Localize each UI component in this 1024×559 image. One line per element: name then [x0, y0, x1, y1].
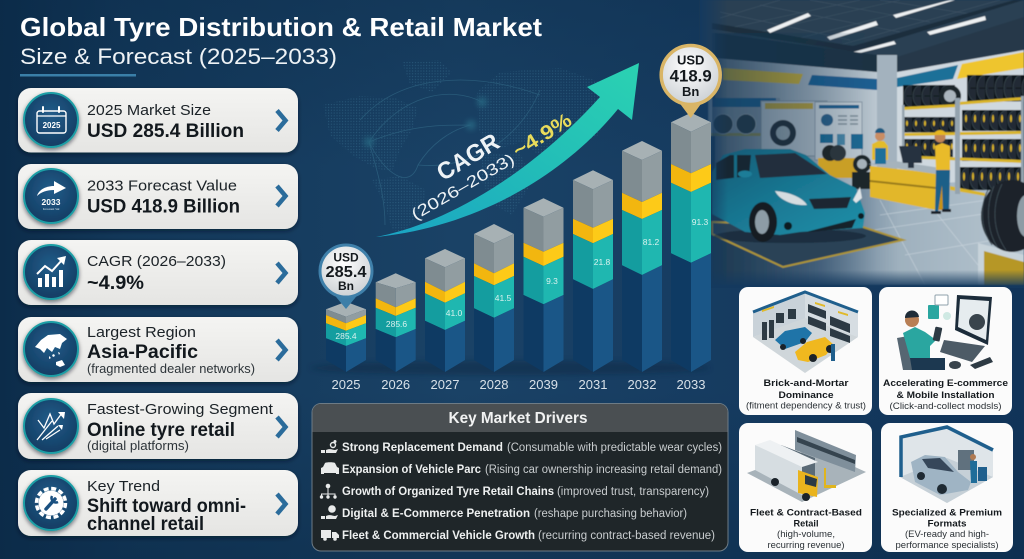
- icon: rising arrows: [24, 399, 78, 453]
- icon: calendar: 2025: [43, 121, 61, 130]
- year axis labels: 2032: [628, 377, 656, 392]
- callout: 2033 value: 418.9: [670, 68, 712, 86]
- driver: replacement demand: (Consumable with predictable wear cycles): [507, 442, 722, 454]
- callout: 2025 value: USD: [333, 250, 359, 264]
- illustration: person with laptop: [897, 295, 993, 370]
- panel header: [312, 404, 728, 432]
- panel: fleet and contract: recurring revenue): [768, 540, 844, 551]
- posters: [708, 98, 863, 160]
- floor tiles: [860, 195, 1024, 285]
- worker at counter: [931, 130, 951, 214]
- year axis labels: 2033: [677, 377, 705, 392]
- card: largest region: [18, 317, 298, 382]
- chevron: [277, 494, 286, 514]
- panel: specialized and premium: (EV-ready and high-: [905, 529, 989, 540]
- panel: e-commerce: Accelerating E-commerce: [883, 378, 1008, 389]
- bar value labels: [335, 217, 709, 341]
- card: largest region: Largest Region: [87, 324, 196, 341]
- back wall header band: [715, 33, 877, 72]
- yellow floor mat: [712, 222, 903, 267]
- bar 2028: [474, 224, 514, 372]
- callout: 2033 value: Bn: [682, 84, 699, 99]
- card: key trend: Shift toward omni-: [87, 496, 246, 517]
- panel: specialized and premium: Formats: [928, 518, 966, 530]
- panel: fleet and contract: (high-volume,: [777, 529, 835, 540]
- driver: fleet: [321, 530, 715, 542]
- callout: 2033 value: USD: [677, 52, 704, 68]
- bar 2031: [573, 170, 613, 372]
- illustration: truck and bus: [747, 430, 866, 502]
- callout: 2025 value: Bn: [338, 279, 354, 293]
- shop image fade left: [700, 0, 728, 285]
- year axis labels: 2039: [529, 377, 558, 392]
- card: key trend: [18, 470, 298, 536]
- tyre shop scene: [700, 0, 1024, 285]
- driver: digital: (reshape purchasing behavior): [534, 508, 687, 520]
- bar value labels: 285.6: [386, 319, 407, 329]
- back wall: [715, 56, 877, 200]
- driver: digital: [321, 505, 687, 520]
- title underline: [20, 74, 136, 76]
- shop counter: [868, 146, 947, 210]
- tyre racks: [902, 75, 1024, 196]
- growth arrow: [376, 63, 639, 237]
- chevron: [277, 110, 286, 130]
- worker at back: [872, 128, 888, 164]
- driver: organized chains: Growth of Organized Tyre Retail Chains: [342, 486, 554, 498]
- bar value labels: 9.3: [546, 276, 558, 286]
- panel: specialized and premium: performance specialists): [896, 540, 998, 551]
- bar value labels: 285.4: [335, 331, 357, 341]
- bar value labels: 81.2: [643, 237, 660, 247]
- card: CAGR: CAGR (2026–2033): [87, 253, 226, 270]
- panel: key market drivers: [312, 404, 728, 551]
- teal car: [712, 149, 866, 243]
- card: largest region: Asia-Pacific: [87, 342, 198, 363]
- bar value labels: 91.3: [692, 217, 709, 227]
- chevron: [277, 417, 286, 437]
- CAGR label: CAGR: [432, 128, 504, 187]
- card: fastest-growing segment: (digital platforms): [87, 439, 189, 453]
- card: 2025 market size: 2025 Market Size: [87, 102, 211, 119]
- icon: Asia-Pacific map: [24, 322, 78, 376]
- driver: organized chains: (improved trust, transparency): [557, 486, 709, 498]
- card: fastest-growing segment: Fastest-Growing Segment: [87, 401, 274, 418]
- card: 2025 market size: USD 285.4 Billion: [87, 121, 244, 142]
- icon: growth chart: [24, 245, 78, 299]
- panel: fleet and contract: Retail: [794, 518, 818, 530]
- shop image fade bottom: [700, 270, 1024, 288]
- bar value labels: 41.5: [495, 293, 512, 303]
- callout: 2025 value: [320, 245, 372, 309]
- year axis labels: 2028: [480, 377, 508, 392]
- icon: calendar: [24, 93, 78, 147]
- card: CAGR: ~4.9%: [87, 273, 144, 294]
- panel: e-commerce: (Click-and-collect modsls): [890, 401, 1002, 412]
- panel: specialized and premium: Specialized & Premium: [892, 508, 1002, 518]
- subtitle: Size & Forecast (2025–2033): [20, 44, 337, 69]
- icon: gear and wrench: [24, 476, 78, 530]
- card: key trend: channel retail: [87, 514, 204, 535]
- right wall: [897, 17, 1024, 190]
- driver: fleet: Fleet & Commercial Vehicle Growth: [342, 530, 535, 542]
- card: 2033 forecast value: USD 418.9 Billion: [87, 196, 240, 218]
- tyre display: [818, 145, 874, 189]
- year axis labels: 2031: [579, 377, 607, 392]
- driver: vehicle parc: Expansion of Vehicle Parc: [342, 464, 482, 476]
- panel: brick-and-mortar: Brick-and-Mortar: [764, 378, 849, 389]
- bar chart: [310, 113, 711, 392]
- bar 2033: [671, 113, 711, 372]
- world map backdrop: [323, 60, 612, 232]
- card: largest region: (fragmented dealer networks): [87, 362, 255, 376]
- card: fastest-growing segment: Online tyre retail: [87, 420, 235, 441]
- year axis labels: 2026: [381, 377, 410, 392]
- card: CAGR: [18, 240, 298, 305]
- bar value labels: 41.0: [446, 308, 463, 318]
- card: fastest-growing segment: [18, 393, 298, 459]
- panel heading: Key Market Drivers: [448, 410, 588, 427]
- illustration: EV garage: [900, 427, 993, 503]
- driver: vehicle parc: (Rising car ownership increasing retail demand): [485, 464, 722, 476]
- floor: [712, 178, 1024, 285]
- chevron: [277, 186, 286, 206]
- scene left shading: [712, 33, 877, 285]
- CAGR value: ~4.9%: [509, 109, 576, 162]
- ceiling: [700, 0, 1024, 72]
- card: 2033 forecast value: [18, 164, 298, 229]
- panel: brick-and-mortar: Dominance: [778, 390, 834, 401]
- driver: fleet: (recurring contract-based revenue): [538, 530, 715, 542]
- back wall stripes: [723, 68, 877, 90]
- panel: brick-and-mortar: [739, 287, 872, 415]
- driver: replacement demand: [321, 440, 722, 454]
- bar 2032: [622, 141, 662, 372]
- icon: forecast arrow: Forecast Val: [43, 207, 60, 211]
- chevron: [277, 263, 286, 283]
- card: 2025 market size: [18, 88, 298, 152]
- title: Global Tyre Distribution & Retail Market: [20, 12, 542, 42]
- year axis labels: [332, 377, 705, 392]
- callout: 2033 value: [661, 46, 720, 118]
- year axis labels: 2025: [332, 377, 360, 392]
- panel: fleet and contract: [739, 423, 872, 552]
- driver: replacement demand: Strong Replacement Demand: [342, 442, 503, 454]
- CAGR years label: (2026–2033): [409, 151, 518, 224]
- driver: vehicle parc: [321, 462, 722, 476]
- driver: organized chains: [320, 484, 709, 499]
- panel: e-commerce: [879, 287, 1012, 415]
- panel: specialized and premium: [881, 423, 1013, 552]
- bar 2039: [524, 198, 564, 372]
- bar 2027: [425, 249, 465, 372]
- bar value labels: 21.8: [594, 257, 611, 267]
- large foreground tyre: [981, 180, 1024, 252]
- chevron: [277, 340, 286, 360]
- panel: fleet and contract: Fleet & Contract-Based: [750, 508, 862, 518]
- panel: e-commerce: & Mobile Installation: [896, 390, 995, 401]
- bar 2025: [326, 302, 366, 372]
- driver: digital: Digital & E-Commerce Penetration: [342, 508, 530, 520]
- icon: forecast arrow: [24, 169, 78, 223]
- callout: 2025 value: 285.4: [326, 264, 367, 281]
- card: key trend: Key Trend: [87, 478, 160, 495]
- card: 2033 forecast value: 2033 Forecast Value: [87, 178, 237, 194]
- panel: brick-and-mortar: (fitment dependency & trust): [746, 400, 866, 412]
- year axis labels: 2027: [431, 377, 459, 392]
- column: [877, 55, 897, 190]
- icon: forecast arrow: 2033: [42, 197, 61, 207]
- bar 2026: [376, 273, 416, 372]
- bar shadow: [310, 361, 710, 375]
- display pedestal: [978, 243, 1024, 285]
- illustration: tyre store: [753, 292, 858, 373]
